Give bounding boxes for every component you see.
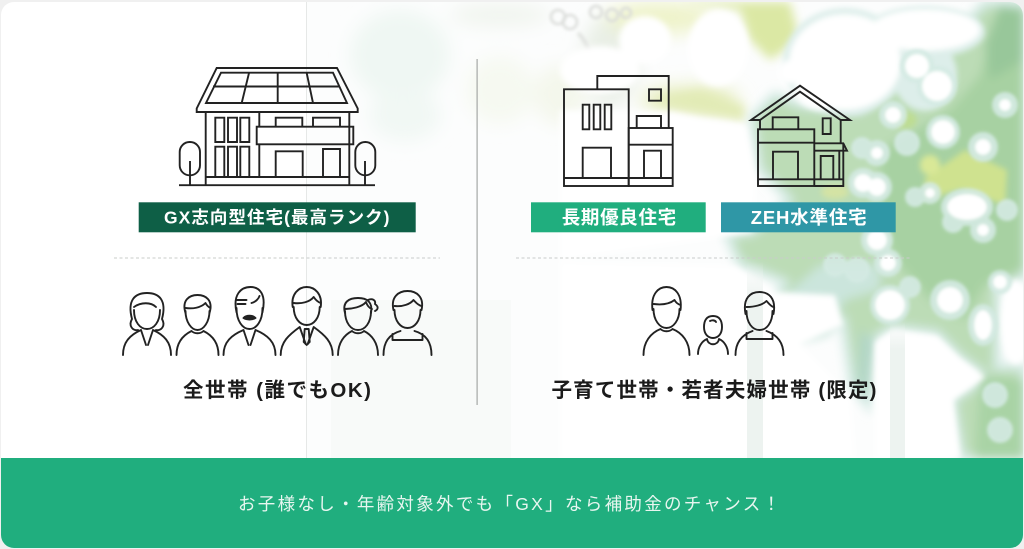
white light patches [560,9,1024,458]
person: man [176,295,218,355]
person: man in suit [281,287,333,355]
label: ZEH house [721,202,896,232]
person: father [644,287,690,355]
label: GX house: GX志向型住宅(最高ランク) [164,208,390,228]
icon: long-term quality house [564,76,673,186]
label: ZEH house: ZEH水準住宅 [751,207,867,228]
heading: all households: 全世帯 (誰でもOK) [183,379,371,402]
footer message: お子様なし・年齢対象外でも「GX」なら補助金のチャンス！ [238,494,780,514]
person: woman with ponytail [338,298,378,355]
yellow-green canopy [650,2,800,122]
pale halos around light patches [783,6,985,116]
person: woman with short hair [123,293,171,355]
person: older man with moustache [224,287,276,355]
icon: family of three [644,287,784,355]
footer banner [1,458,1023,548]
pale tree trunks [747,262,763,458]
icon: ZEH house [751,86,850,186]
label: long-term quality house: 長期優良住宅 [562,207,676,228]
person: woman with apron [384,291,432,355]
icon: six household people [123,287,432,355]
person: child [698,316,728,354]
icon: GX house with solar roof and trees [179,68,375,185]
label: long-term quality house [531,202,706,232]
panel: all households (left column) [123,68,432,402]
central vertical divider [476,59,478,405]
bokeh circles [823,49,1018,443]
background: foliage photograph [306,2,1024,458]
heading: child-raising and young couple households: 子育て世帯・若者夫婦世帯 (限定) [552,379,876,402]
label: GX house [139,202,416,232]
panel: child-raising households (right column) [531,76,896,402]
main green mass [727,3,1024,458]
grey ring cluster [549,4,632,46]
yellow-green highlights [821,110,1009,204]
person: mother [736,292,784,355]
